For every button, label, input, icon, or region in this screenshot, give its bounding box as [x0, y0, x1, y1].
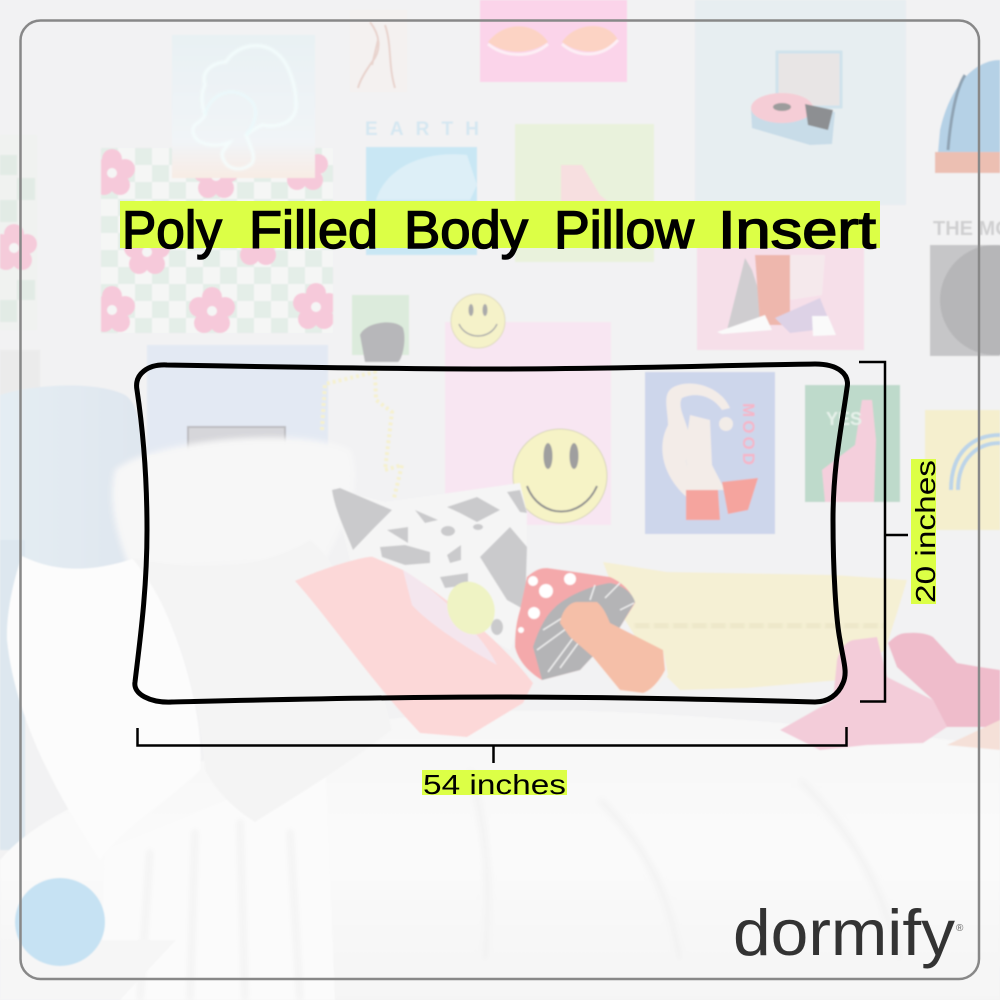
- mushroom pillow: [515, 568, 668, 696]
- large smiley: [513, 429, 607, 523]
- white pillow left: [7, 556, 201, 860]
- long yellow pillow: [603, 562, 907, 690]
- title: [120, 201, 880, 260]
- yes hand poster: YES: [826, 409, 862, 429]
- earth poster: EARTH: [365, 119, 479, 140]
- pink flower pillow: [295, 557, 533, 737]
- pillow outline: [135, 364, 847, 702]
- people poster: [697, 245, 864, 350]
- mood cat poster: MOOD: [739, 403, 758, 465]
- dormify logo: ®: [956, 923, 964, 934]
- width label: 54 inches: [423, 769, 566, 800]
- title: Filled: [249, 201, 378, 260]
- checkered flower tapestry: [89, 144, 339, 333]
- the moon poster: [930, 218, 1000, 356]
- pink eyes poster: [480, 0, 627, 82]
- height dimension bracket: [859, 362, 908, 702]
- left grey wall band: [0, 350, 40, 395]
- neon mushroom sign: [172, 35, 315, 178]
- mood cat poster: [645, 372, 775, 534]
- pink poster: [445, 322, 611, 525]
- width dimension bracket: [138, 727, 846, 763]
- fluffy white pillow: [112, 437, 355, 570]
- rainbow poster: [925, 410, 1000, 530]
- blue headboard: [0, 386, 145, 600]
- bison poster: [352, 295, 409, 362]
- earth poster: [365, 119, 479, 255]
- figure poster: [350, 10, 407, 92]
- title: Poly: [122, 201, 222, 260]
- title: Body: [404, 201, 529, 260]
- yes hand poster: [805, 385, 900, 502]
- white waffle pillow: [132, 540, 392, 822]
- left wavy tapestry: [0, 155, 38, 322]
- blue cassette poster: [147, 345, 328, 457]
- bed blanket: [0, 711, 1000, 1000]
- title: Pillow: [554, 201, 695, 260]
- title: Insert: [718, 201, 876, 260]
- height label: 20 inches: [910, 460, 941, 603]
- blue smiley clock: [15, 878, 105, 966]
- cow print pillow: [332, 483, 527, 650]
- record player poster: [695, 0, 906, 205]
- red and pink pillows right: [780, 633, 1000, 750]
- small smiley: [451, 294, 505, 348]
- side table: [0, 940, 176, 1000]
- far right blue poster: [935, 60, 1000, 173]
- lightning string lights: [322, 372, 402, 498]
- green skate poster: [515, 124, 654, 262]
- dormify logo: dormify: [733, 896, 956, 969]
